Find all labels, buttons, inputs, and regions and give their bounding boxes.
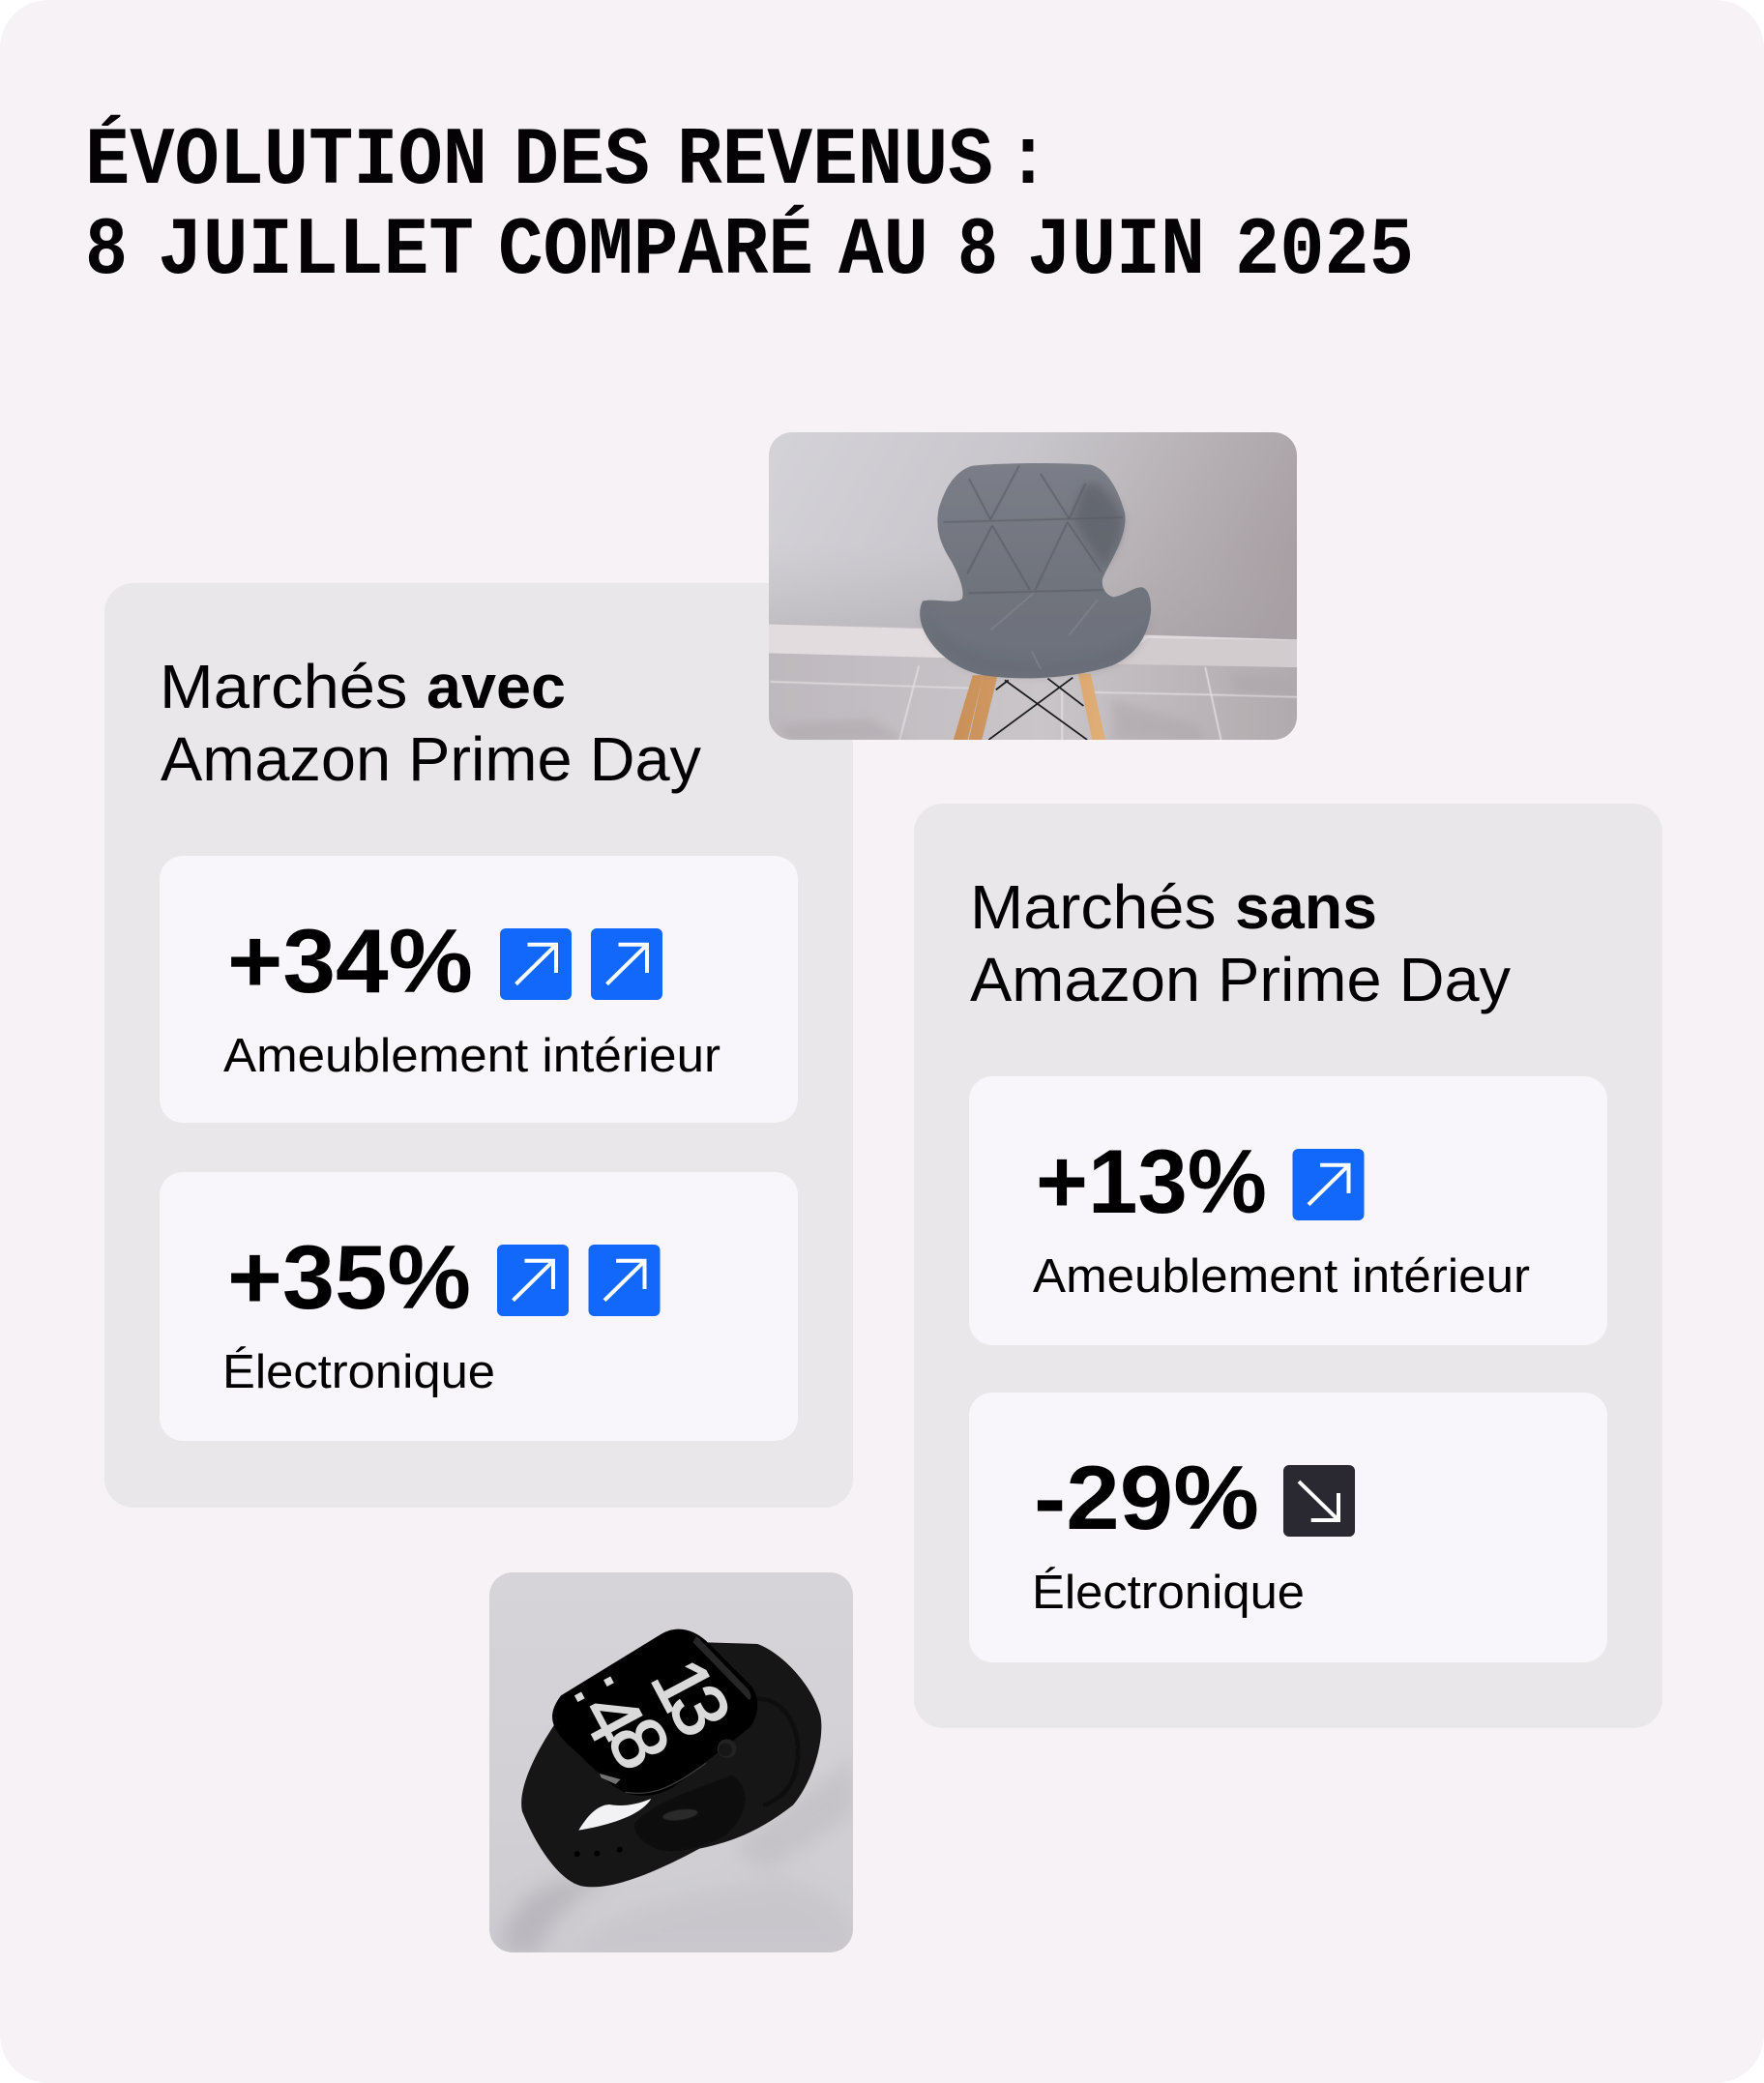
- icon: down arrow: [1283, 1465, 1355, 1537]
- photo: smartwatch: [486, 1570, 858, 1956]
- title: [85, 115, 1414, 298]
- heading: markets without: Amazon Prime Day: [970, 945, 1511, 1014]
- title: REVENUS: [677, 116, 993, 208]
- watch strap: [521, 1642, 821, 1887]
- watch face digits: 4: [565, 1678, 661, 1756]
- value -29%: -29%: [1034, 1447, 1259, 1548]
- heading: markets with: Marchés: [160, 652, 426, 721]
- watch face digits: 3: [652, 1671, 748, 1749]
- chair legs: [953, 674, 1105, 742]
- heading: markets without: [970, 872, 1511, 1014]
- heading: markets with: avec: [426, 652, 566, 721]
- label: furniture: Ameublement intérieur: [1033, 1250, 1530, 1303]
- icon: up arrow 1: [500, 928, 572, 1000]
- value +13%: +13%: [1036, 1130, 1267, 1232]
- watch case: [552, 1629, 757, 1796]
- watch face digits: :: [557, 1657, 643, 1716]
- watch face digits: 1: [634, 1645, 731, 1723]
- card: electronics -29%: [969, 1393, 1607, 1662]
- title: 2025: [1235, 206, 1414, 298]
- title: ÉVOLUTION: [85, 115, 487, 208]
- title: 8: [85, 206, 128, 298]
- icon: up arrow 2: [591, 928, 662, 1000]
- value +34%: +34%: [227, 910, 473, 1012]
- heading: markets without: sans: [1235, 872, 1377, 942]
- icon: up arrow 2: [588, 1245, 660, 1316]
- heading: markets with: Amazon Prime Day: [161, 724, 701, 794]
- label: electronics: Électronique: [222, 1346, 495, 1398]
- panel: markets without Prime Day: [914, 804, 1662, 1728]
- title: DES: [514, 116, 650, 208]
- label: electronics: Électronique: [1032, 1567, 1305, 1619]
- icon: up arrow 1: [497, 1245, 569, 1316]
- heading: markets with: [160, 652, 701, 794]
- icon: up arrow: [1292, 1149, 1364, 1220]
- panel: markets with Prime Day: [104, 583, 853, 1508]
- heading: markets without: Marchés: [970, 872, 1234, 942]
- title: :: [1006, 116, 1050, 208]
- card: furniture +34%: [160, 856, 798, 1123]
- title: AU: [838, 206, 928, 298]
- watch face digits: [574, 1662, 727, 1768]
- title: COMPARÉ: [498, 205, 813, 298]
- card: furniture +13%: [969, 1076, 1607, 1345]
- card: electronics +35%: [160, 1172, 798, 1441]
- label: furniture: Ameublement intérieur: [223, 1030, 720, 1082]
- value +35%: +35%: [227, 1226, 471, 1328]
- watch face digits: 8: [591, 1704, 688, 1782]
- photo: grey chair: [769, 432, 1297, 740]
- title: JUIN: [1027, 206, 1205, 298]
- title: 8: [957, 206, 998, 298]
- chair shell: [920, 463, 1151, 678]
- strap gap highlight: [578, 1799, 651, 1831]
- title: JUILLET: [158, 206, 474, 298]
